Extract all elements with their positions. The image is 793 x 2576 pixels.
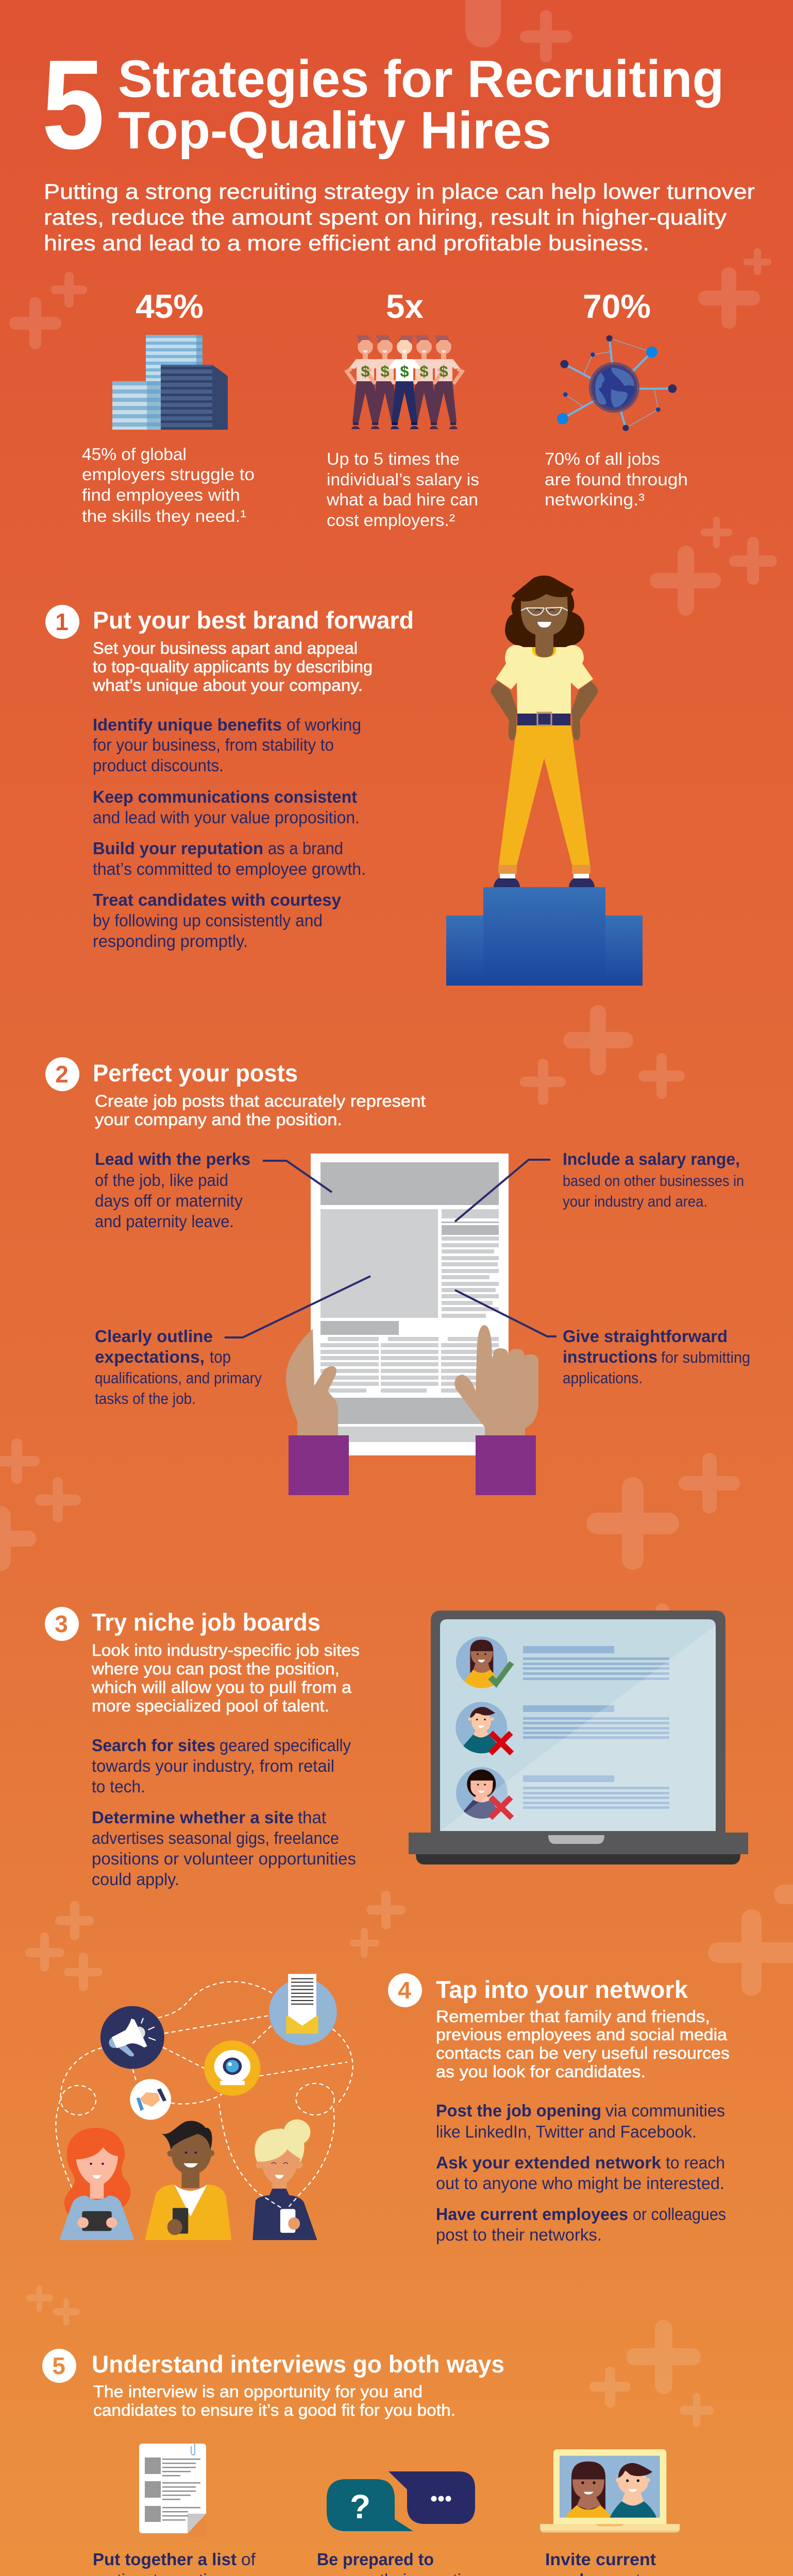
tip: reputation: that’s committed to employee growth.	[93, 859, 366, 878]
tip: unique benefits: Identify unique benefits	[93, 715, 282, 734]
step number 2: 2	[55, 1061, 69, 1088]
tip: courtesy: by following up consistently and	[93, 911, 323, 930]
heading: Perfect your posts	[93, 1059, 298, 1087]
callout: salary range: based on other businesses in	[563, 1173, 744, 1190]
tip: determine site	[92, 1808, 356, 1889]
panel: step 1 brand	[45, 575, 643, 986]
callout: salary range: Include a salary range,	[563, 1149, 740, 1168]
stat description	[545, 449, 688, 509]
stat number 5x: 5x	[386, 287, 424, 325]
tip: communications: Keep communications consistent	[93, 787, 357, 806]
stat description	[326, 449, 479, 530]
title: 5	[42, 33, 105, 176]
tip: communications: and lead with your value proposition.	[93, 808, 360, 827]
intro text block: hires and lead to a more efficient and profitable business.	[44, 231, 649, 255]
tip: unique benefits: product discounts.	[93, 756, 224, 775]
tip: current employees: or colleagues	[633, 2205, 726, 2224]
column: list of questions: Put together a list	[93, 2550, 237, 2569]
icon: office buildings	[112, 335, 228, 430]
subheading	[92, 639, 373, 694]
callout: instructions	[563, 1327, 750, 1387]
tip: extended network: Ask your extended network	[436, 2153, 662, 2172]
subheading: what’s unique about your company.	[92, 676, 363, 694]
stat description: what a bad hire can	[326, 490, 478, 509]
callout: lead with perks	[95, 1149, 250, 1231]
callout: expectations: qualifications, and primary	[95, 1369, 262, 1387]
subheading: more specialized pool of talent.	[92, 1697, 329, 1715]
tip: reputation	[93, 839, 366, 878]
tip: reputation: as a brand	[268, 839, 343, 858]
title: Strategies for Recruiting	[118, 49, 724, 108]
subheading: The interview is an opportunity for you and	[93, 2382, 423, 2401]
step number 1: 1	[55, 608, 69, 635]
subheading	[436, 2007, 730, 2081]
tip: search for sites: to tech.	[92, 1777, 145, 1796]
icon: five people with dollar shirts	[347, 335, 462, 429]
subheading: previous employees and social media	[436, 2025, 727, 2044]
illustration: woman on podium	[446, 575, 643, 986]
tip: determine site: positions or volunteer opportunities	[92, 1849, 356, 1868]
tip: extended network	[436, 2153, 725, 2193]
panel: stat 5x	[326, 287, 479, 530]
callout: lead with perks: of the job, like paid	[95, 1171, 228, 1190]
subheading: Create job posts that accurately represent	[95, 1092, 426, 1110]
heading: Understand interviews go both ways	[92, 2350, 504, 2378]
tip: determine site: could apply.	[92, 1870, 179, 1889]
subheading: contacts can be very useful resources	[436, 2044, 730, 2062]
tip: current employees	[436, 2205, 726, 2244]
callout: instructions: Give straightforward	[563, 1327, 728, 1346]
stat number 45%: 45%	[136, 287, 204, 325]
icon: laptop video call	[540, 2449, 680, 2533]
subheading: candidates to ensure it’s a good fit for you both.	[93, 2401, 455, 2419]
icon: question and answer speech bubbles	[327, 2471, 475, 2531]
stat description: cost employers.²	[327, 511, 455, 530]
callout: expectations: Clearly outline	[95, 1327, 213, 1346]
stat description: 70% of all jobs	[545, 449, 660, 468]
tip: courtesy: responding promptly.	[93, 931, 248, 951]
step number 5	[42, 2349, 76, 2383]
tip: search for sites	[92, 1736, 351, 1796]
callout: lead with perks: and paternity leave.	[95, 1212, 234, 1231]
tip: search for sites: towards your industry, from retail	[92, 1756, 334, 1775]
callout: salary range	[563, 1149, 744, 1210]
panel: step 2 posts	[45, 1057, 750, 1495]
panel: step 5 interviews	[42, 2349, 680, 2576]
subheading: where you can post the position,	[91, 1659, 340, 1678]
callout: lead with perks: days off or maternity	[95, 1191, 243, 1210]
step number 1	[45, 605, 79, 639]
step number 5: 5	[52, 2352, 65, 2379]
panel: stat 70%	[545, 287, 688, 509]
illustration: laptop with candidates	[409, 1611, 748, 1865]
stat description: networking.³	[545, 490, 645, 509]
intro text block	[44, 179, 755, 255]
subheading: to top-quality applicants by describing	[93, 657, 373, 676]
tip: search for sites: Search for sites	[92, 1736, 215, 1755]
column: list of questions: of	[241, 2550, 256, 2569]
subheading: Remember that family and friends,	[436, 2007, 710, 2026]
callout: expectations	[95, 1327, 262, 1408]
tip: unique benefits	[93, 715, 361, 775]
icon: five people with dollar shirts: $	[361, 362, 370, 380]
intro text block: Putting a strong recruiting strategy in place can help lower turnover	[44, 179, 755, 204]
icon: five people with dollar shirts: $	[419, 362, 429, 380]
column: invite employees: Invite current	[545, 2550, 656, 2569]
title: Top-Quality Hires	[118, 101, 551, 160]
callout: expectations: expectations,	[95, 1347, 205, 1366]
heading: Tap into your network	[436, 1976, 688, 2003]
stat description: the skills they need.¹	[82, 506, 246, 526]
stat description: individual’s salary is	[327, 470, 479, 489]
subheading: which will allow you to pull from a	[91, 1678, 351, 1697]
subheading: Set your business apart and appeal	[93, 639, 358, 657]
stat number 70%: 70%	[583, 287, 651, 325]
icon: question and answer speech bubbles: ?	[350, 2487, 370, 2526]
step number 3	[45, 1607, 79, 1641]
column: be prepared: Be prepared to	[317, 2550, 434, 2569]
icon: five people with dollar shirts: $	[439, 362, 448, 380]
stat description: 45% of global	[82, 445, 187, 464]
icon: question list document	[139, 2443, 206, 2537]
step number 2	[45, 1057, 79, 1091]
illustration: job post document held by hands	[286, 1154, 538, 1495]
subheading	[95, 1092, 426, 1129]
column: be prepared	[317, 2550, 488, 2576]
title	[42, 33, 724, 176]
callout: lead with perks: Lead with the perks	[95, 1149, 250, 1168]
illustration: connected people network	[56, 1974, 353, 2240]
panel: stat 45%	[82, 287, 255, 526]
stat description: employers struggle to	[82, 465, 255, 484]
tip: post job opening: Post the job opening	[436, 2101, 601, 2120]
tip: determine site: advertises seasonal gigs, freelance	[92, 1828, 339, 1848]
panel: step 4 network	[56, 1973, 730, 2244]
tip: current employees: post to their networks.	[436, 2225, 602, 2244]
tip: post job opening: via communities	[605, 2101, 725, 2120]
heading: Try niche job boards	[92, 1608, 320, 1636]
tip: extended network: to reach	[666, 2153, 725, 2172]
column: invite employees	[545, 2550, 675, 2576]
subheading: Look into industry-specific job sites	[92, 1641, 360, 1659]
tip: determine site: Determine whether a site	[92, 1808, 294, 1827]
callout: expectations: tasks of the job.	[95, 1389, 196, 1408]
icon: five people with dollar shirts: $	[400, 362, 409, 380]
stat description: Up to 5 times the	[327, 449, 460, 468]
tip: determine site: that	[298, 1808, 326, 1827]
tip: reputation: Build your reputation	[93, 839, 263, 858]
subheading	[93, 2382, 455, 2419]
subheading: as you look for candidates.	[436, 2062, 646, 2081]
subheading	[91, 1641, 360, 1715]
tip: post job opening	[436, 2101, 725, 2141]
intro text block: rates, reduce the amount spent on hiring, result in higher-quality	[44, 205, 727, 229]
stat description: find employees with	[82, 485, 240, 504]
tip: unique benefits: of working	[286, 715, 361, 734]
icon: five people with dollar shirts: $	[380, 362, 390, 380]
column: list of questions	[93, 2550, 259, 2576]
tip: communications	[93, 787, 360, 827]
tip: extended network: out to anyone who might be interested.	[436, 2174, 724, 2193]
step number 4: 4	[398, 1977, 411, 2004]
tip: post job opening: like LinkedIn, Twitter and Facebook.	[436, 2122, 697, 2141]
callout: instructions: instructions	[563, 1347, 657, 1366]
step number 3: 3	[55, 1611, 68, 1637]
callout arrows	[225, 1160, 556, 1337]
tip: courtesy	[93, 890, 342, 951]
tip: search for sites: geared specifically	[220, 1736, 351, 1755]
panel: step 3 job boards	[45, 1607, 748, 1889]
step number 4	[388, 1973, 422, 2007]
tip: unique benefits: for your business, from stability to	[93, 735, 334, 754]
heading: Put your best brand forward	[93, 606, 414, 634]
stat description: are found through	[545, 470, 688, 489]
subheading: your company and the position.	[95, 1110, 342, 1129]
callout: instructions: applications.	[563, 1369, 643, 1387]
tip: courtesy: Treat candidates with courtesy	[93, 890, 342, 909]
tip: current employees: Have current employees	[436, 2205, 628, 2224]
icon: globe network	[557, 335, 677, 431]
callout: salary range: your industry and area.	[563, 1193, 707, 1210]
stat description	[82, 445, 255, 526]
callout: expectations: top	[210, 1347, 231, 1366]
callout: instructions: for submitting	[661, 1348, 750, 1366]
